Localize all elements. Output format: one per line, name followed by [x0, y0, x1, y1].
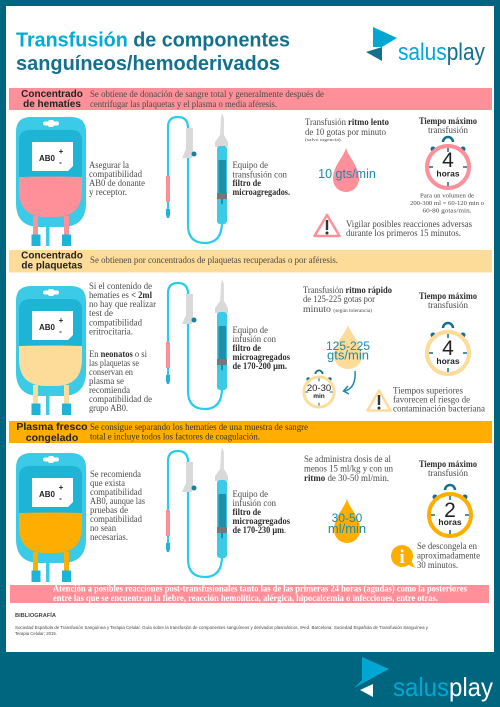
- text: ritmo plasma: Se administra dosis de al: [304, 454, 391, 464]
- text: compatibilidad hematíes: y receptor.: [89, 187, 127, 197]
- text: tiempo máximo hematíes: Tiempo máximo: [419, 116, 477, 126]
- text: contaminación bacteriana: [393, 386, 485, 414]
- transfusion set: hematíes: [166, 113, 228, 243]
- text: volumen: 60-80 gotas/min.: [422, 208, 472, 214]
- text: vigilar reacciones: durante los primeros 15 minutos.: [346, 228, 461, 238]
- text: compatibilidad plasma: Se recomienda: [90, 469, 141, 479]
- text: compatibilidad plaquetas: compatibilidad: [89, 318, 142, 328]
- section band: concentrado de hematíes: centrifugar las plaquetas y el plasma o media aféresis.: [90, 99, 277, 109]
- transfusion set: plasma: [166, 447, 228, 577]
- blood bag: hematíes: [16, 117, 86, 246]
- info icon: i: [399, 547, 405, 568]
- title: [16, 30, 290, 75]
- bibliography: Sociedad Española de Transfusión Sanguínea y Terapia Celular. Guía sobre la transfusión de componentes sanguíneos y derivados plasmáticos. 5ªed. Barcelona: Sociedad Española de Transfusión Sanguínea y: [15, 625, 429, 630]
- clock: 4 horas: 4: [442, 149, 454, 172]
- text: compatibilidad plasma: pruebas de: [90, 505, 128, 515]
- small clock: 20-30 min: [304, 370, 334, 407]
- text: compatibilidad plaquetas: [89, 281, 156, 413]
- title: sanguíneos/hemoderivados: [16, 53, 280, 75]
- blood bag: plasma: AB0: [39, 490, 56, 499]
- drop: 30-50 ml/min: [328, 499, 366, 543]
- text: equipo hematíes: microagregados.: [232, 187, 290, 197]
- text: compatibilidad plaquetas: eritrocitaria.: [89, 326, 133, 336]
- clock: 4 horas plaquetas: horas: [436, 356, 460, 366]
- text: ritmo hematíes: de 10 gotas por minuto: [305, 127, 386, 137]
- section band: plasma fresco congelado: total e incluye todos los factores de coagulación.: [90, 432, 260, 442]
- text: compatibilidad plaquetas: hematíes es < 2ml: [89, 290, 152, 300]
- bibliography: Terapia Celular; 2015.: [15, 631, 57, 636]
- text: equipo plaquetas: de 170-200 µm.: [232, 361, 287, 371]
- text: contaminación bacteriana: favorecen el riesgo de: [393, 394, 470, 404]
- text: compatibilidad hematíes: Asegurar la: [89, 160, 129, 170]
- callout: reacciones post-transfusionales: [10, 584, 489, 603]
- text: compatibilidad plasma: que exista: [90, 478, 125, 488]
- section band: plasma fresco congelado: [9, 421, 492, 444]
- callout: reacciones post-transfusionales: entre las que se encuentran la fiebre, reacción hemolítica, alérgica, hipocalcemia o infecciones, entre otras.: [53, 593, 438, 603]
- bibliography: BIBLIOGRAFÍA: [15, 611, 56, 619]
- clock: 2 horas: horas: [438, 517, 462, 527]
- info icon: [391, 545, 415, 568]
- text: contaminación bacteriana: contaminación bacteriana: [393, 404, 485, 414]
- clock: 4 horas: horas: [436, 168, 460, 178]
- blood bag: hematíes: AB0: [39, 154, 56, 163]
- text: descongelación: Se descongela en: [417, 541, 477, 551]
- blood bag: plaquetas: [16, 286, 86, 415]
- logo: salusplay header: salusplay: [398, 39, 485, 66]
- text: compatibilidad plaquetas: En neonatos o si: [89, 349, 147, 359]
- text: ritmo plaquetas: Transfusión ritmo rápido: [303, 285, 392, 295]
- text: tiempo máximo plaquetas: Tiempo máximo: [419, 291, 477, 301]
- text: ritmo plasma: [304, 454, 393, 483]
- text: tiempo máximo plasma: Tiempo máximo: [419, 459, 477, 469]
- text: equipo hematíes: transfusión con: [232, 170, 287, 180]
- text: equipo plasma: microagregados: [232, 516, 290, 526]
- text: equipo plasma: de 170-230 µm.: [232, 525, 286, 535]
- text: compatibilidad plaquetas: compatibilidad de: [89, 394, 152, 404]
- drop: 10 gts/min: 10 gts/min: [318, 167, 376, 181]
- blood bag: hematíes: -: [59, 158, 62, 167]
- text: compatibilidad plaquetas: conservan en: [89, 367, 133, 377]
- text: equipo plasma: [232, 489, 290, 535]
- blood bag: plasma: +: [59, 483, 64, 492]
- text: compatibilidad plaquetas: las plaquetas se: [89, 358, 139, 368]
- text: ritmo plaquetas: minuto (según tolerancia): [303, 304, 372, 314]
- section band: concentrado de plaquetas: Se obtienen por concentrados de plaquetas recuperadas o por aféresis.: [90, 255, 338, 265]
- text: ritmo plasma: menos 15 ml/kg y con un: [304, 464, 393, 474]
- drop: 125-225 gts/min: [326, 325, 370, 369]
- section band: plasma fresco congelado: Se consigue separando los hematíes de una muestra de sangre: [90, 422, 308, 432]
- text: compatibilidad plaquetas: no hay que realizar: [89, 299, 156, 309]
- text: equipo plaquetas: Equipo de: [232, 325, 268, 335]
- drop: 125-225 gts/min: 125-225: [326, 339, 370, 353]
- section band: concentrado de hematíes: [9, 88, 492, 110]
- small clock: 20-30 min: 20-30: [307, 383, 331, 394]
- blood bag: hematíes: +: [59, 147, 64, 156]
- text: vigilar reacciones: Vigilar posibles reacciones adversas: [346, 219, 472, 229]
- text: ritmo hematíes: [305, 117, 389, 142]
- bibliography: [15, 611, 429, 636]
- text: compatibilidad hematíes: AB0 de donante: [89, 178, 145, 188]
- text: equipo plaquetas: filtro de: [232, 343, 261, 353]
- section band: concentrado de hematíes: Se obtiene de donación de sangre total y generalmente después de: [90, 89, 324, 99]
- drop: 10 gts/min: [318, 148, 376, 192]
- text: equipo hematíes: Equipo de: [232, 160, 268, 170]
- title: Transfusión de componentes: [16, 30, 290, 52]
- blood bag: plasma: [16, 453, 86, 582]
- text: compatibilidad plaquetas: grupo AB0.: [89, 403, 128, 413]
- clock: 2 horas: [429, 485, 471, 536]
- text: compatibilidad plasma: compatibilidad: [90, 487, 142, 497]
- text: compatibilidad plasma: no sean: [90, 523, 116, 533]
- drop: 30-50 ml/min: 30-50: [332, 511, 363, 525]
- text: compatibilidad plasma: compatibilidad: [90, 514, 142, 524]
- text: compatibilidad plaquetas: test de: [89, 308, 113, 318]
- blood bag: plaquetas: -: [59, 327, 62, 336]
- text: compatibilidad plaquetas: plasma se: [89, 376, 124, 386]
- logo: salusplay footer: salusplay: [393, 672, 493, 702]
- logo: salusplay footer: [354, 657, 493, 702]
- text: descongelación: 30 minutos.: [417, 560, 458, 570]
- text: compatibilidad plaquetas: recomienda: [89, 385, 130, 395]
- text: descongelación: aproximadamente: [417, 550, 480, 560]
- text: ritmo plaquetas: [303, 285, 392, 314]
- text: compatibilidad plasma: AB0, aunque las: [90, 496, 145, 506]
- drop: 30-50 ml/min: ml/min: [328, 521, 366, 536]
- text: equipo plasma: infusión con: [232, 498, 276, 508]
- text: equipo plasma: Equipo de: [232, 489, 268, 499]
- clock: 2 horas: 2: [444, 499, 456, 522]
- text: descongelación: [417, 541, 480, 570]
- text: tiempo máximo hematíes: transfusión: [428, 125, 468, 135]
- text: compatibilidad hematíes: [89, 160, 145, 197]
- warning icon: plaquetas: [368, 390, 390, 410]
- text: equipo hematíes: [232, 160, 290, 197]
- section band: concentrado de plaquetas: Concentrado: [21, 250, 83, 262]
- text: compatibilidad plasma: necesarias.: [90, 532, 128, 542]
- section band: concentrado de hematíes: Concentrado: [21, 89, 83, 100]
- logo: salusplay header: [366, 27, 485, 66]
- blood bag: plaquetas: +: [59, 316, 64, 325]
- text: compatibilidad plasma: [90, 469, 145, 542]
- text: equipo hematíes: filtro de: [232, 178, 261, 188]
- warning icon: hematíes: [314, 215, 340, 236]
- text: vigilar reacciones: [346, 219, 472, 238]
- text: equipo plaquetas: infusión con: [232, 334, 276, 344]
- text: tiempo máximo plasma: [419, 459, 477, 478]
- text: ritmo hematíes: (salvo urgencia).: [305, 137, 342, 142]
- text: ritmo plasma: ritmo de 30-50 ml/min.: [304, 473, 389, 483]
- text: equipo plaquetas: microagregados: [232, 352, 290, 362]
- blood bag: plaquetas: AB0: [39, 323, 56, 332]
- text: equipo plaquetas: [232, 325, 290, 371]
- text: volumen: 200-300 ml = 60-120 min o: [410, 200, 484, 207]
- callout: reacciones post-transfusionales: Atención a posibles reacciones post-transfusionales tanto las de las primeras 24 horas (agudas) como la posteriores: [53, 584, 467, 594]
- section band: plasma fresco congelado: congelado: [26, 432, 78, 444]
- section band: plasma fresco congelado: Plasma fresco: [16, 421, 88, 433]
- text: volumen: Para un volumen de: [420, 192, 474, 200]
- blood bag: plasma: -: [59, 494, 62, 503]
- section band: concentrado de plaquetas: [9, 250, 492, 272]
- text: tiempo máximo hematíes: [419, 116, 477, 135]
- text: ritmo hematíes: Transfusión ritmo lento: [305, 117, 389, 127]
- text: volumen: [410, 192, 484, 214]
- text: compatibilidad plaquetas: Si el contenido de: [89, 281, 152, 291]
- transfusion set: plaquetas: [166, 279, 228, 409]
- text: ritmo plaquetas: de 125-225 gotas por: [303, 294, 375, 304]
- drop: 125-225 gts/min: gts/min: [327, 348, 369, 362]
- clock: 4 horas plaquetas: [427, 323, 469, 374]
- text: tiempo máximo plasma: transfusión: [428, 468, 468, 478]
- text: tiempo máximo plaquetas: transfusión: [428, 300, 468, 310]
- text: compatibilidad hematíes: compatibilidad: [89, 169, 142, 179]
- section band: concentrado de plaquetas: de plaquetas: [21, 260, 83, 272]
- text: tiempo máximo plaquetas: [419, 291, 477, 310]
- section band: concentrado de hematíes: de hematíes: [23, 99, 81, 110]
- clock: 4 horas: [427, 137, 469, 188]
- text: equipo plasma: filtro de: [232, 507, 261, 517]
- clock: 4 horas plaquetas: 4: [442, 337, 454, 360]
- arrow: goteo a tiempo: [344, 371, 355, 394]
- text: contaminación bacteriana: Tiempos superiores: [393, 386, 463, 396]
- small clock: 20-30 min: min: [313, 393, 325, 400]
